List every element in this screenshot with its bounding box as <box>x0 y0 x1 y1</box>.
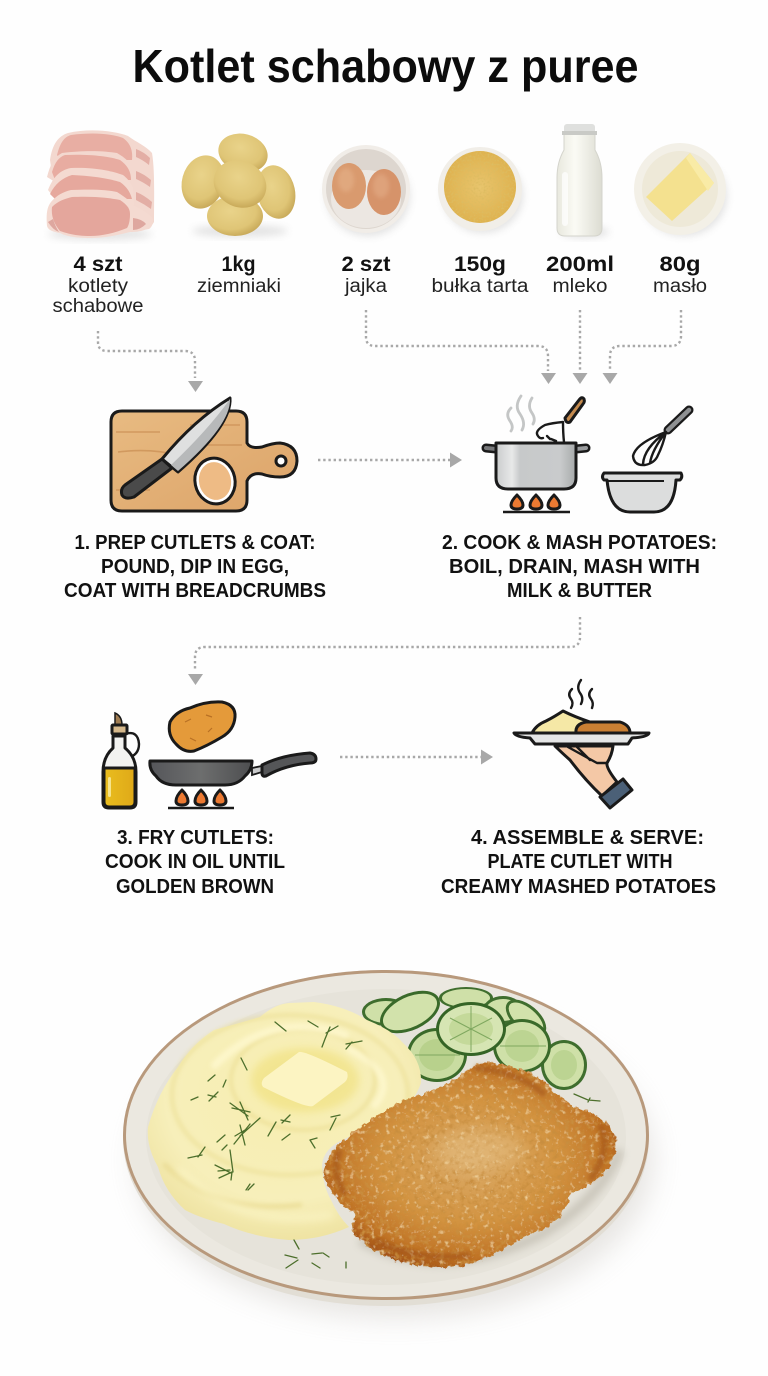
step 1 text: COAT WITH BREADCRUMBS <box>64 580 326 602</box>
label: 4 szt kotlety schabowe: 4 szt <box>74 253 123 276</box>
icon: cutting board, knife and bowl <box>111 398 297 511</box>
arrow: cutlets to step 1 <box>98 331 203 392</box>
icon: plate with mash and cutlet <box>514 711 649 744</box>
panel: step 1 <box>64 398 326 602</box>
mash swirls <box>165 1015 408 1218</box>
step 3 text <box>105 827 285 898</box>
icon: frying pan on burner <box>150 753 316 808</box>
label: 150g bułka tarta: 150g <box>454 253 506 276</box>
ingredient image: pork cutlets <box>47 130 154 240</box>
plate <box>123 970 649 1306</box>
step 4 text: PLATE CUTLET WITH <box>488 851 672 873</box>
label: 200ml mleko: mleko <box>552 276 608 297</box>
arrow: eggs and crumbs to step 2 <box>366 310 556 384</box>
label: 80g masło <box>653 253 707 297</box>
panel: step 4 <box>441 680 716 898</box>
step 1 text: 1. PREP CUTLETS & COAT: <box>74 532 316 554</box>
icon: flying cutlet <box>169 702 235 751</box>
icon: pot on burner <box>486 443 586 512</box>
step 3 text: COOK IN OIL UNTIL <box>105 851 285 873</box>
step 2 text: BOIL, DRAIN, MASH WITH <box>449 556 700 578</box>
arrow: step 2 to step 3 <box>188 617 580 685</box>
step 4 text: CREAMY MASHED POTATOES <box>441 876 716 898</box>
step 3 text: GOLDEN BROWN <box>116 876 274 898</box>
butter pat <box>262 1052 348 1106</box>
ingredient image: potatoes <box>176 128 300 237</box>
label: 200ml mleko <box>546 253 614 297</box>
label: 1kg ziemniaki: ziemniaki <box>197 276 281 297</box>
arrow: step 3 to step 4 <box>340 750 493 764</box>
dill on plate <box>285 1094 600 1268</box>
mashed potatoes <box>148 1002 600 1268</box>
title: Kotlet schabowy z puree <box>132 40 638 92</box>
photo: finished dish on a plate <box>123 970 653 1318</box>
label: 4 szt kotlety schabowe <box>52 253 144 317</box>
step 2 text: MILK & BUTTER <box>507 580 653 602</box>
cucumber slices <box>362 982 587 1090</box>
step 1 text <box>64 532 326 602</box>
plate shadow <box>137 1002 653 1318</box>
ingredient image: butter on a plate <box>634 143 727 236</box>
ingredient image: milk bottle <box>557 124 609 238</box>
label: 1kg ziemniaki <box>197 253 281 297</box>
cutlet shadow <box>360 1150 620 1261</box>
step 2 text <box>442 532 717 602</box>
panel: step 3 <box>103 702 316 898</box>
icon: oil bottle <box>103 713 139 808</box>
panel: step 2 <box>442 396 717 602</box>
panel: ingredients <box>47 124 727 317</box>
label: 2 szt jajka <box>342 253 391 297</box>
step 4 text <box>441 827 716 898</box>
step 2 text: 2. COOK & MASH POTATOES: <box>442 532 717 554</box>
arrow: butter to step 2 <box>602 310 681 384</box>
label: 150g bułka tarta: bułka tarta <box>432 276 529 297</box>
icon: potato masher <box>537 398 584 442</box>
label: 200ml mleko: 200ml <box>546 253 614 276</box>
arrow: step 1 to step 2 <box>318 452 462 468</box>
ingredient image: eggs in a bowl <box>322 145 410 236</box>
step 3 text: 3. FRY CUTLETS: <box>117 827 274 849</box>
arrow: milk to step 2 <box>572 310 588 384</box>
label: 4 szt kotlety schabowe: schabowe <box>52 296 144 317</box>
step 1 text: POUND, DIP IN EGG, <box>101 556 289 578</box>
label: 1kg ziemniaki: 1kg <box>222 253 256 276</box>
fried cutlet <box>324 1062 616 1267</box>
icon: hand holding plate <box>555 746 632 808</box>
dill on mash <box>188 1021 362 1190</box>
label: 2 szt jajka: jajka <box>344 276 387 297</box>
icon: steam <box>569 680 593 708</box>
label: 80g masło: 80g <box>660 253 700 276</box>
label: 2 szt jajka: 2 szt <box>342 253 391 276</box>
icon: whisk and bowl <box>602 410 689 512</box>
ingredient image: breadcrumbs in a bowl <box>438 147 523 233</box>
step 4 text: 4. ASSEMBLE & SERVE: <box>471 827 704 849</box>
label: 80g masło: masło <box>653 276 707 297</box>
label: 150g bułka tarta <box>432 253 529 297</box>
butter pool <box>251 1048 359 1112</box>
icon: steam <box>508 396 534 431</box>
label: 4 szt kotlety schabowe: kotlety <box>68 276 129 297</box>
